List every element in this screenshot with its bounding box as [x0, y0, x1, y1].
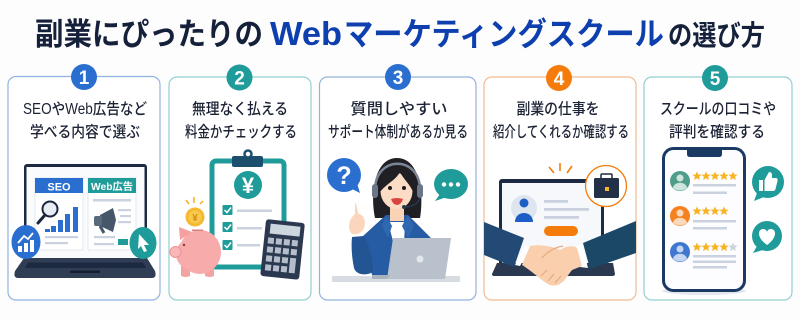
- heading step 2: 料金かチェックする: [185, 123, 297, 141]
- icon: growth chart badge: [12, 225, 40, 259]
- icon: clipboard with yen: [212, 150, 284, 267]
- badge 5: 5: [710, 69, 721, 90]
- badge 2: 2: [234, 68, 245, 90]
- panel: step 2: [169, 64, 311, 300]
- heading step 3: 質問しやすい: [350, 100, 448, 118]
- icon: calculator: [260, 219, 305, 280]
- icon: laptop with SEO and Web ad screens: [12, 164, 156, 278]
- heading step 1: SEOやWeb広告など: [23, 100, 147, 118]
- badge 2: [226, 64, 252, 90]
- heading step 2: [185, 100, 297, 141]
- icon: clipboard with yen: ¥: [242, 173, 255, 198]
- badge 3: 3: [393, 68, 403, 89]
- icon: cursor badge: [130, 227, 156, 259]
- icon: question bubble: [327, 158, 361, 193]
- heading step 5: スクールの口コミや: [660, 100, 776, 118]
- heading step 2: 無理なく払える: [192, 100, 288, 118]
- heading step 1: 学べる内容で選ぶ: [30, 123, 140, 141]
- heading step 5: [660, 100, 776, 141]
- badge 4: 4: [554, 69, 565, 90]
- review row 2: [670, 206, 736, 230]
- icon: heart bubble: [752, 221, 782, 253]
- heading step 4: 紹介してくれるか確認する: [493, 123, 629, 141]
- icon: briefcase badge: [586, 166, 626, 206]
- illustration: profile screen: [492, 179, 615, 276]
- heading step 1: [23, 100, 147, 141]
- panel: step 1: [8, 64, 160, 300]
- panel: step 4: [484, 65, 636, 300]
- icon: chat bubble: [434, 169, 468, 201]
- badge 3: [385, 64, 411, 90]
- heading step 3: サポート体制があるか見る: [328, 122, 468, 141]
- badge 4: [546, 65, 572, 91]
- title: Web: [270, 15, 342, 52]
- title: の選び方: [668, 20, 765, 51]
- title: 副業にぴったりの: [35, 17, 263, 52]
- illustration: support operator with headset and laptop: [332, 158, 460, 282]
- heading step 3: [328, 100, 468, 141]
- icon: attention rays: [549, 163, 572, 173]
- icon: piggy bank with coin: [170, 197, 221, 277]
- badge 1: [71, 64, 97, 90]
- heading step 4: 副業の仕事を: [516, 100, 600, 118]
- panel: step 5: [644, 65, 792, 300]
- review row 3: [670, 242, 738, 268]
- heading step 5: 評判を確認する: [669, 123, 765, 141]
- badge 5: [702, 65, 728, 91]
- icon: piggy bank with coin: ¥: [192, 213, 198, 224]
- icon: laptop with SEO and Web ad screens: Web広告: [91, 180, 133, 193]
- illustration: handshake: [484, 221, 636, 286]
- panel: step 3: [320, 64, 476, 300]
- review row 1: [670, 171, 738, 194]
- badge 1: 1: [79, 68, 90, 89]
- icon: question bubble: ?: [336, 162, 352, 190]
- title: [35, 15, 765, 52]
- icon: laptop with SEO and Web ad screens: SEO: [47, 182, 71, 194]
- icon: thumbs up bubble: [752, 166, 784, 201]
- title: マーケティングスクール: [344, 16, 664, 52]
- heading step 4: [493, 100, 629, 141]
- icon: smartphone with reviews: [662, 148, 746, 295]
